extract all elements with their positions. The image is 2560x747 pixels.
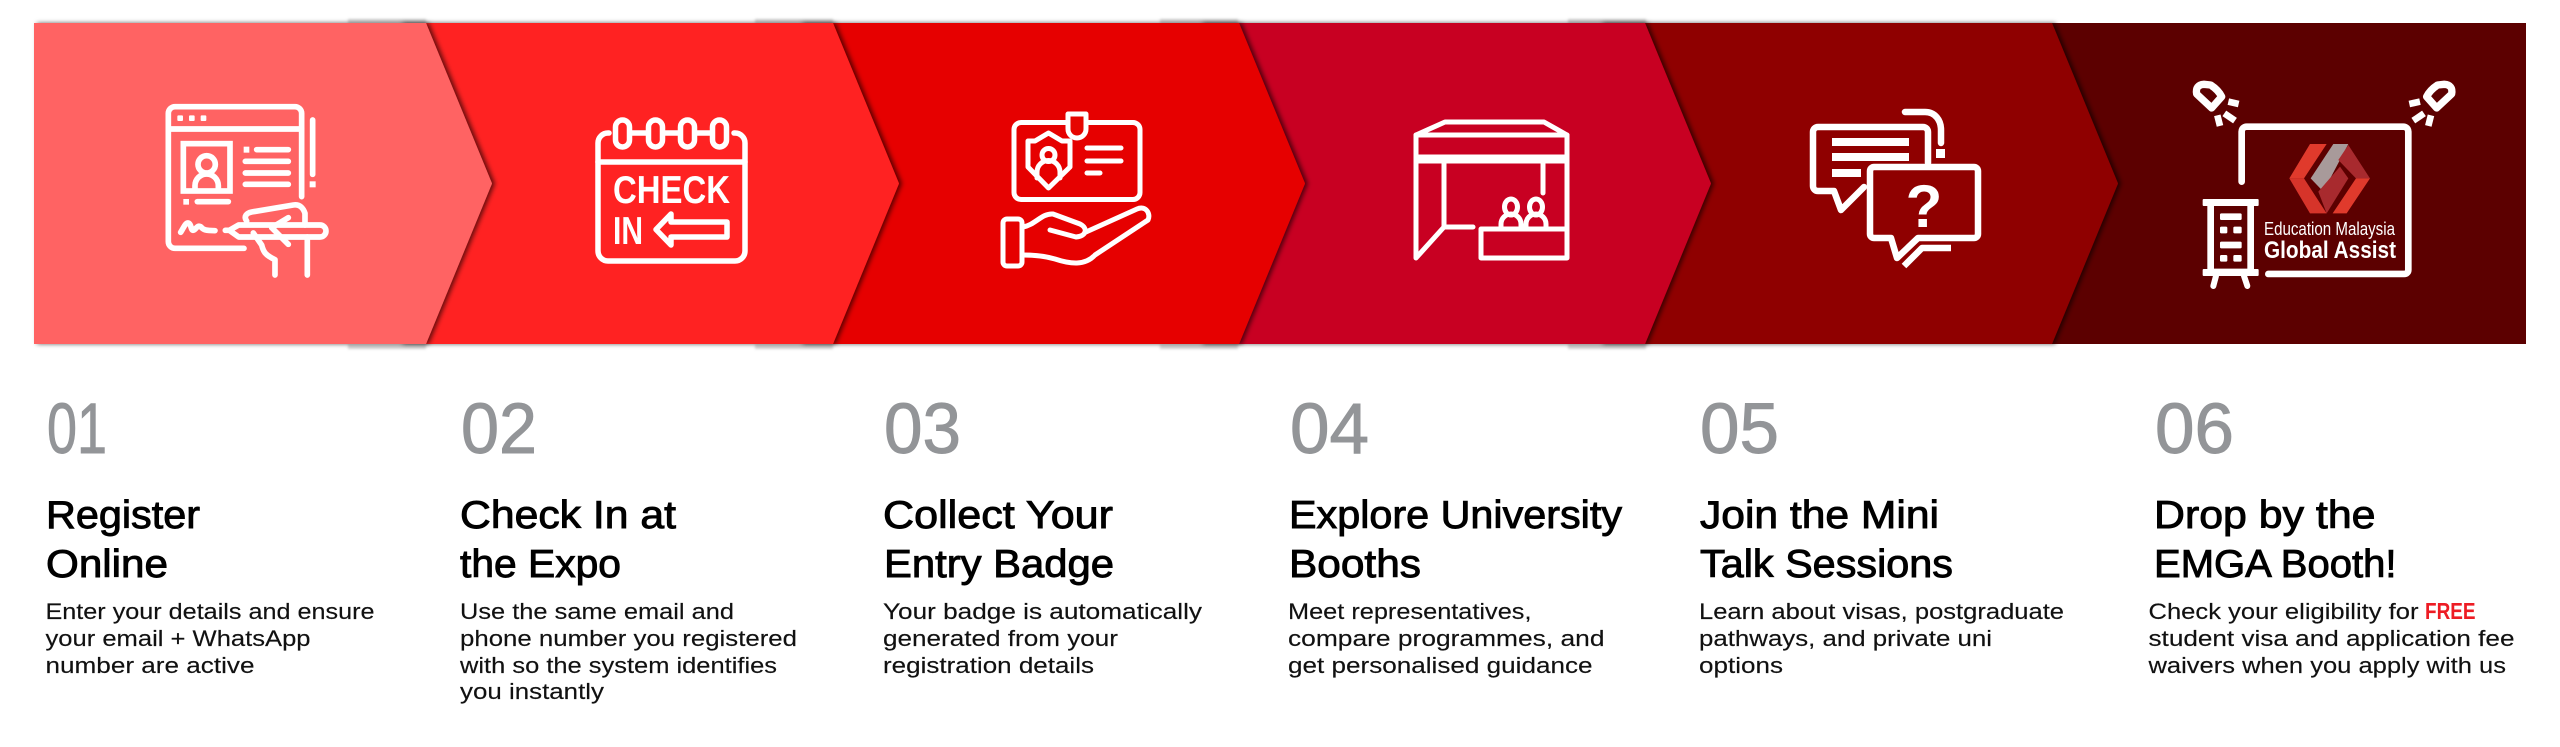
chevron band <box>34 19 2526 349</box>
icon: check-in calendar <box>598 120 745 261</box>
step 4 text <box>1288 390 1623 678</box>
heading <box>1700 494 1953 586</box>
heading: Entry Badge <box>884 543 1114 586</box>
heading <box>46 494 200 586</box>
heading <box>1289 494 1623 586</box>
icon: entry badge over open hand <box>1003 114 1149 266</box>
body: phone number you registered <box>460 626 797 651</box>
chevron 6 <box>2000 23 2526 344</box>
display board <box>2242 127 2408 274</box>
body <box>883 599 1202 678</box>
heading: Explore University <box>1289 494 1623 537</box>
body <box>459 599 797 704</box>
heading: Booths <box>1289 543 1421 586</box>
body: registration details <box>883 653 1094 678</box>
body: with so the system identifies <box>459 653 777 678</box>
body: FREE <box>2425 598 2476 624</box>
heading: Talk Sessions <box>1700 543 1953 586</box>
chevron 1 <box>34 23 492 344</box>
body: pathways, and private uni <box>1699 626 1992 651</box>
body <box>1288 599 1604 678</box>
body: you instantly <box>460 679 604 704</box>
heading: Online <box>46 543 168 586</box>
number: 01 <box>47 390 107 469</box>
step 1 text <box>46 390 374 678</box>
number: 04 <box>1290 390 1369 469</box>
heading <box>883 494 1114 586</box>
heading: Check In at <box>460 494 676 537</box>
heading <box>2154 494 2396 586</box>
body <box>1699 599 2064 678</box>
heading: Join the Mini <box>1700 494 1939 537</box>
body: Use the same email and <box>460 599 734 624</box>
icon: EMGA booth with logo <box>2196 84 2452 286</box>
body: your email + WhatsApp <box>46 626 310 651</box>
body: options <box>1699 653 1783 678</box>
heading: Register <box>46 494 200 537</box>
logo <box>2289 144 2370 213</box>
number: 02 <box>461 390 537 469</box>
icon: university booth <box>1416 122 1567 258</box>
body: generated from your <box>883 626 1118 651</box>
heading: Drop by the <box>2154 494 2376 537</box>
body <box>46 599 374 678</box>
number: 06 <box>2155 390 2234 469</box>
body: Learn about visas, postgraduate <box>1699 599 2064 624</box>
body: student visa and application fee <box>2148 626 2514 651</box>
body: number are active <box>46 653 254 678</box>
step 2 text <box>459 390 797 704</box>
step 6 text <box>2147 390 2514 678</box>
icon: online registration form <box>168 107 326 275</box>
body: Meet representatives, <box>1288 599 1532 624</box>
logo wordmark: Education Malaysia <box>2264 218 2396 239</box>
chevron 2 <box>400 23 899 344</box>
body: compare programmes, and <box>1288 626 1604 651</box>
logo wordmark: Global Assist <box>2264 237 2396 264</box>
body: Check your eligibility for <box>2148 599 2418 624</box>
chevron 5 <box>1600 23 2118 344</box>
icon: talk session speech bubbles <box>1813 112 1978 266</box>
chevron 4 <box>1200 23 1711 344</box>
heading <box>460 494 676 586</box>
number: 03 <box>884 390 961 469</box>
icon: check-in calendar: CHECK <box>613 169 730 212</box>
heading: the Expo <box>460 543 621 586</box>
heading: EMGA Booth! <box>2154 543 2396 586</box>
body: waivers when you apply with us <box>2147 653 2506 678</box>
icon: talk session speech bubbles: ? <box>1906 173 1942 240</box>
heading: Collect Your <box>883 494 1113 537</box>
chevron 3 <box>800 23 1305 344</box>
step 5 text <box>1699 390 2064 678</box>
number: 05 <box>1700 390 1779 469</box>
body: Your badge is automatically <box>883 599 1202 624</box>
step 3 text <box>883 390 1202 678</box>
icon: check-in calendar: IN <box>613 210 643 253</box>
logo wordmark <box>2264 218 2396 264</box>
body <box>2147 598 2514 678</box>
banner stand <box>2203 199 2259 286</box>
body: Enter your details and ensure <box>46 599 374 624</box>
body: get personalised guidance <box>1288 653 1592 678</box>
spotlights <box>2196 84 2452 126</box>
